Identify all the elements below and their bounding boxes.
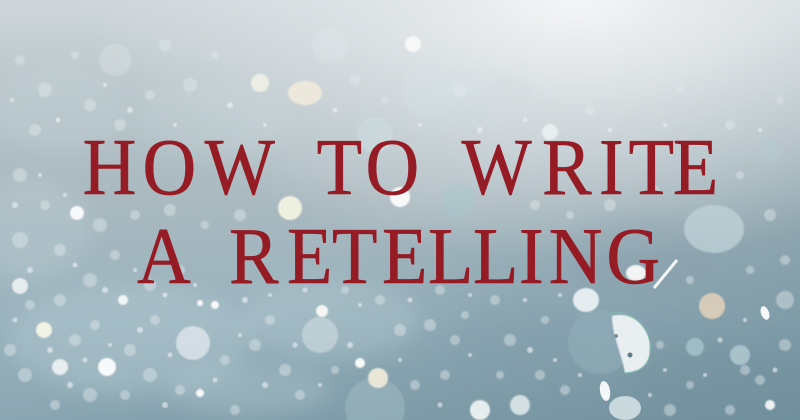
title line 2: ARETELLING [137, 212, 660, 301]
background: large translucent bokeh discs [99, 27, 782, 420]
title line 1: HOWTOWRITE [83, 123, 718, 212]
background: fine bright specks [10, 83, 778, 408]
title: how to write a retelling [83, 123, 718, 301]
background: big lit droplet at lower right [598, 260, 771, 420]
